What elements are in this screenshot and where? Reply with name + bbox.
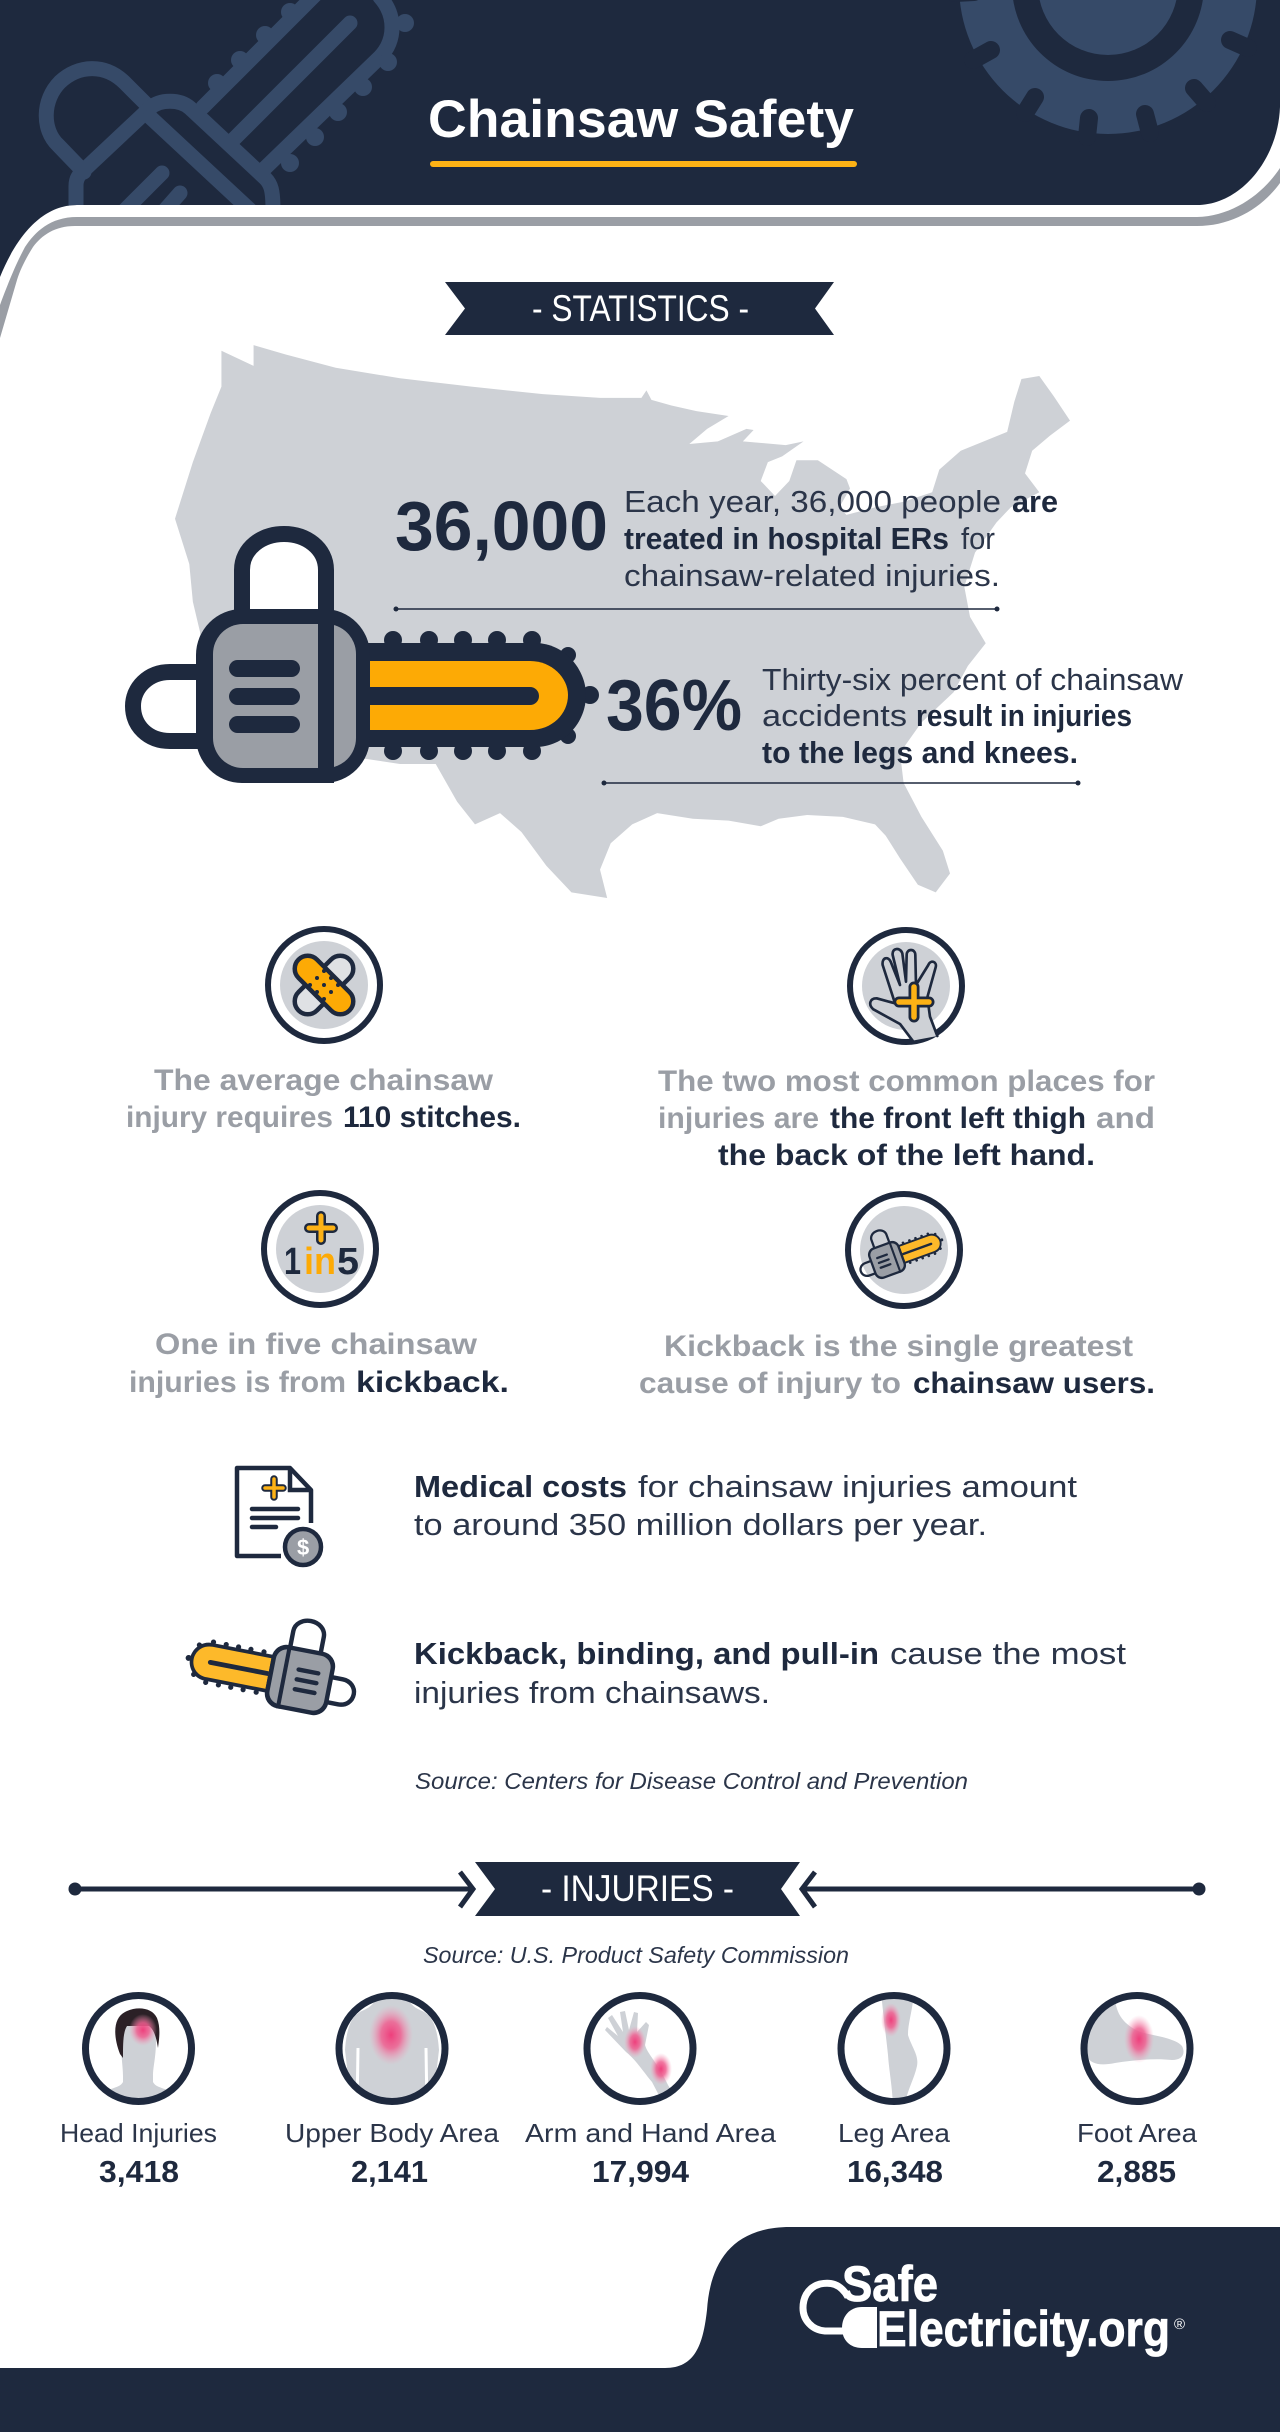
- text block: stitches: [126, 1064, 521, 1134]
- text block: kickback: Kickback is the single greatest: [664, 1330, 1133, 1363]
- text block: kickback binding pull-in: [414, 1636, 1126, 1710]
- heading: statistics banner: - STATISTICS -: [532, 288, 749, 329]
- item: head injuries: 3,418: [99, 2154, 179, 2189]
- text block: medical costs: to around 350 million dollars per year.: [414, 1507, 987, 1542]
- source: product safety commission: Source: U.S. Product Safety Commission: [423, 1942, 849, 1968]
- text block: kickback binding pull-in: injuries from chainsaws.: [414, 1675, 770, 1710]
- panel: footer: [0, 2227, 1280, 2432]
- text block: 36% description: accidents: [762, 698, 907, 733]
- icon: 1 in 5: 5: [337, 1241, 359, 1283]
- icon: medical bill: [237, 1468, 321, 1565]
- text block: 36,000 description: chainsaw-related injuries.: [624, 558, 1000, 593]
- text block: 36% description: to the legs and knees.: [762, 735, 1078, 770]
- logo: SafeElectricity.org: Electricity.org: [877, 2301, 1170, 2357]
- icon: background gear: [955, 0, 1261, 137]
- item: foot: Foot Area: [1077, 2118, 1198, 2148]
- icon: head: [86, 1996, 192, 2110]
- item: arm and hand: [525, 1996, 777, 2189]
- item: arm and hand: Arm and Hand Area: [525, 2118, 777, 2148]
- logo: SafeElectricity.org: [803, 2256, 1185, 2357]
- source: CDC: Source: Centers for Disease Control and Prevention: [415, 1768, 968, 1794]
- text block: kickback: chainsaw users.: [913, 1367, 1155, 1400]
- text block: one in five: injuries is from: [129, 1366, 346, 1399]
- item: head injuries: [60, 1996, 217, 2189]
- text block: medical costs: Medical costs: [414, 1469, 627, 1504]
- text block: 36,000 description: treated in hospital ERs: [624, 521, 949, 556]
- stat: 36,000: 36,000: [395, 487, 608, 565]
- title underline: [430, 161, 857, 167]
- decorative gray swoosh: [0, 168, 1280, 338]
- item: leg: [838, 1990, 951, 2189]
- stat: 36%: 36%: [606, 666, 742, 746]
- item: foot: [1077, 1995, 1198, 2189]
- item: head injuries: Head Injuries: [60, 2118, 217, 2148]
- item: upper body: 2,141: [351, 2154, 428, 2189]
- text block: 36,000 description: Each year, 36,000 people: [624, 484, 1001, 519]
- stat: 36,000: [395, 484, 1058, 593]
- icon: medical bill: $: [297, 1535, 309, 1560]
- heading: injuries banner: [68, 1862, 1206, 1916]
- text block: common injury places: the back of the left hand.: [718, 1139, 1095, 1172]
- text block: 36,000 description: are: [1012, 484, 1058, 519]
- text block: one in five: One in five chainsaw: [155, 1328, 478, 1361]
- text block: kickback binding pull-in: Kickback, binding, and pull-in: [414, 1636, 879, 1671]
- icon: 1 in 5: [264, 1193, 376, 1305]
- heading: statistics banner: [445, 282, 834, 335]
- text block: stitches: 110 stitches.: [343, 1101, 521, 1134]
- text block: common injury places: injuries are: [658, 1102, 819, 1135]
- text block: 36% description: Thirty-six percent of chainsaw: [762, 662, 1184, 697]
- item: leg: Leg Area: [838, 2118, 951, 2148]
- map: United States silhouette: [175, 345, 1070, 898]
- icon: small chainsaw: [179, 1599, 366, 1722]
- text block: common injury places: The two most common places for: [658, 1065, 1155, 1098]
- icon: torso: [339, 1990, 445, 2110]
- text block: 36% description: result in injuries: [916, 698, 1132, 733]
- icon: 1 in 5: 1: [284, 1241, 301, 1283]
- text block: 36,000 description: for: [961, 521, 995, 556]
- text block: common injury places: [658, 1065, 1155, 1172]
- text block: kickback: cause of injury to: [639, 1367, 901, 1400]
- icon: injured hand: [850, 930, 962, 1042]
- text block: kickback: [639, 1330, 1155, 1400]
- heading: injuries banner: - INJURIES -: [541, 1868, 734, 1909]
- text block: stitches: injury requires: [126, 1101, 333, 1134]
- item: leg: 16,348: [847, 2154, 943, 2189]
- text block: common injury places: the front left thigh: [830, 1102, 1086, 1135]
- text block: one in five: [129, 1328, 509, 1399]
- logo: SafeElectricity.org: Safe: [842, 2256, 938, 2312]
- item: arm and hand: 17,994: [592, 2154, 690, 2189]
- text block: 36% description: [762, 662, 1184, 770]
- panel: header banner: [0, 0, 1280, 277]
- text block: medical costs: [414, 1469, 1077, 1542]
- icon: leg: [841, 1990, 947, 2105]
- icon: crossed bandages: [268, 929, 380, 1041]
- icon: 1 in 5: in: [304, 1241, 336, 1283]
- item: foot: 2,885: [1097, 2154, 1176, 2189]
- icon: large chainsaw: [133, 534, 599, 783]
- icon: background chainsaw outline: [46, 0, 414, 210]
- text block: medical costs: for chainsaw injuries amount: [638, 1469, 1077, 1504]
- text block: 36,000 description: [624, 484, 1058, 593]
- text block: stitches: The average chainsaw: [154, 1064, 494, 1097]
- text block: common injury places: and: [1096, 1102, 1155, 1135]
- text block: kickback binding pull-in: cause the most: [890, 1636, 1126, 1671]
- text block: one in five: kickback.: [356, 1366, 509, 1399]
- icon: chainsaw in circle: [848, 1194, 960, 1306]
- stat: 36%: [606, 662, 1184, 770]
- title: Chainsaw Safety: [428, 90, 855, 149]
- logo: SafeElectricity.org: ®: [1174, 2316, 1185, 2333]
- icon: foot: [1084, 1995, 1190, 2102]
- icon: arm: [587, 1996, 693, 2105]
- item: upper body: [285, 1990, 500, 2189]
- item: upper body: Upper Body Area: [285, 2118, 500, 2148]
